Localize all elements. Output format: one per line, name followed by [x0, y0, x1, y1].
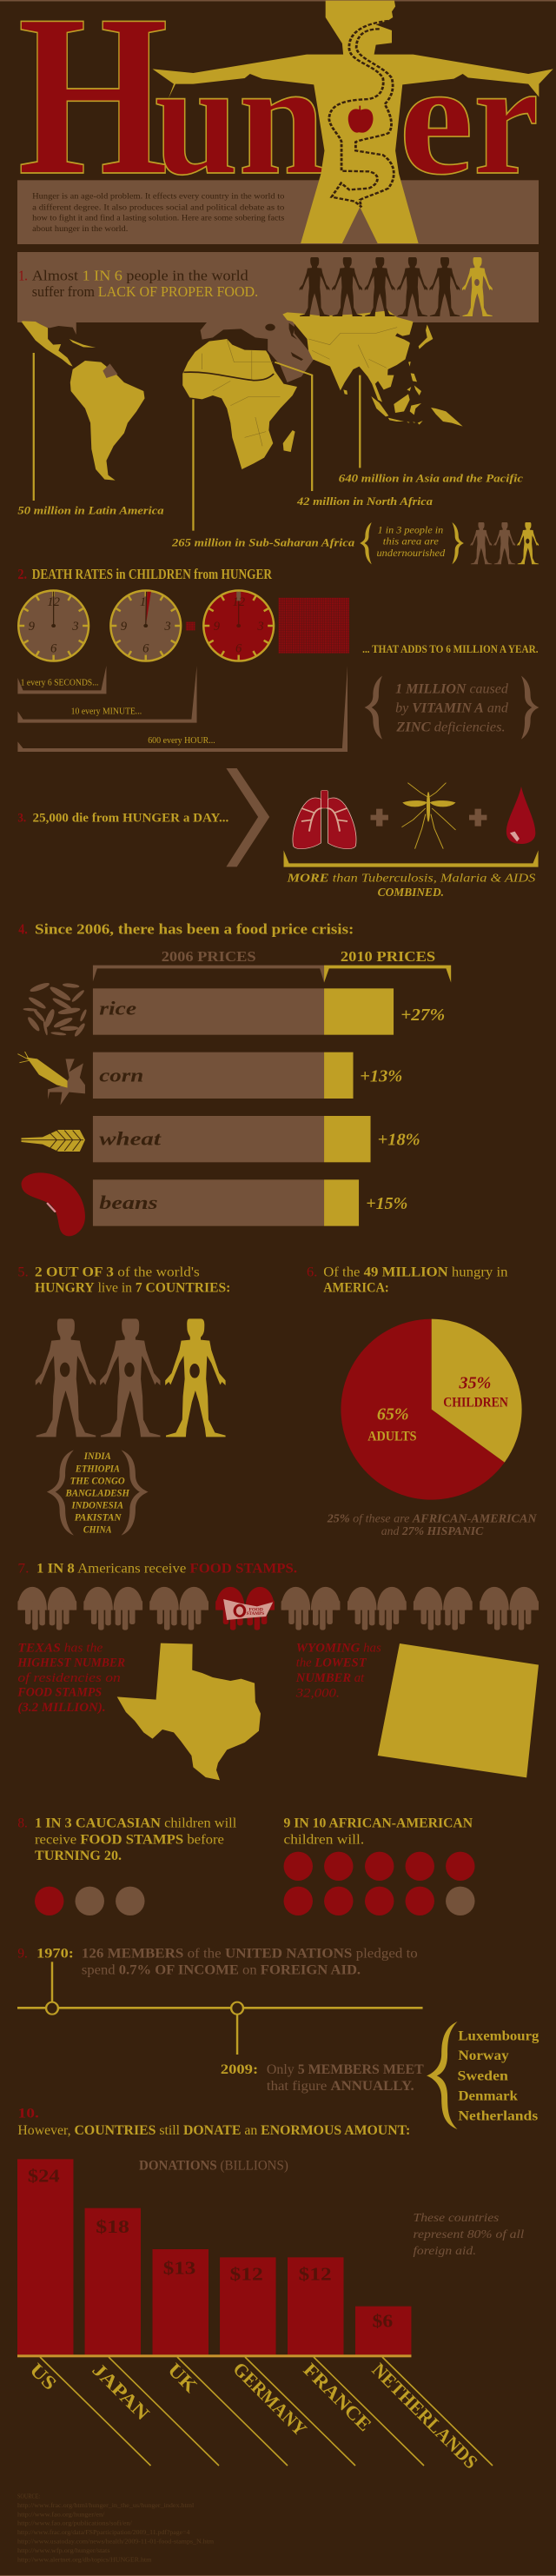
bracket: 2010: [324, 966, 451, 983]
note line 1: 1 in 3 people in: [378, 524, 443, 535]
brace right: [122, 1450, 149, 1536]
fact 1 heading line 1: Almost 1 IN 6 people in the world: [32, 268, 248, 283]
source 6: http://www.wfp.org/hunger/stats: [17, 2547, 110, 2554]
intro line 1: Hunger is an age-old problem. It effects every country in the world to: [32, 193, 284, 201]
icon: six people, one in six yellow: [300, 257, 493, 316]
title letter n: n: [238, 30, 325, 208]
African-American line 1: 9 IN 10 AFRICAN-AMERICAN: [284, 1815, 473, 1830]
world map: [17, 310, 539, 564]
label: Latin America: 50 million in Latin America: [17, 505, 164, 517]
1970 text line 1: 126 MEMBERS of the UNITED NATIONS pledged to: [82, 1945, 418, 1961]
Wyoming line 2: the LOWEST: [296, 1655, 367, 1670]
text: every 6 seconds: 1 every 6 SECONDS...: [21, 678, 99, 687]
map: Southeast Asia islands: [343, 324, 463, 427]
country: Germany: GERMANY: [228, 2358, 311, 2440]
title letter e: e: [399, 30, 473, 208]
icon: rice: [23, 981, 88, 1038]
clock 3: 6: [235, 641, 242, 655]
bracket: hour: [17, 666, 348, 752]
section 2 number: 2.: [17, 567, 27, 582]
Netherlands: Netherlands: [458, 2108, 538, 2123]
dots: 9 in 10: [284, 1852, 475, 1915]
source 2: http://www.fao.org/hunger/en/: [17, 2511, 105, 2518]
source heading: SOURCE:: [17, 2493, 40, 2500]
pie note line 2: and 27% HISPANIC: [381, 1525, 484, 1538]
map: Wyoming: [378, 1643, 539, 1777]
sections 8 and 9: [17, 1815, 539, 2129]
section 10 heading: However, COUNTRIES still DONATE an ENORMOUS AMOUNT:: [17, 2122, 410, 2138]
Wyoming line 1: WYOMING has: [296, 1640, 381, 1655]
intro text: [32, 193, 284, 234]
bar: corn: [93, 1052, 402, 1099]
fact 1 heading line 2: suffer from LACK OF PROPER FOOD.: [32, 284, 258, 300]
Texas line 3: of residencies on: [17, 1670, 121, 1685]
value: Japan: $18: [96, 2217, 129, 2237]
plus sign: [469, 809, 486, 827]
section 10: donations: [17, 2105, 524, 2357]
brace left: [360, 522, 372, 564]
Sweden: Sweden: [458, 2068, 508, 2083]
clock 3: 3: [256, 620, 264, 634]
note line 1: These countries: [414, 2212, 499, 2225]
top border: [0, 0, 556, 2]
intro line 4: about hunger in the world.: [32, 225, 128, 234]
country: Japan: JAPAN: [88, 2359, 154, 2425]
2009 text line 1: Only 5 MEMBERS MEET: [267, 2061, 424, 2077]
column head: 2006: 2006 PRICES: [162, 949, 256, 965]
country list: [65, 1450, 130, 1535]
country: Netherlands: NETHERLANDS: [367, 2359, 482, 2473]
column head: 2010: 2010 PRICES: [341, 949, 435, 965]
clock 3: [203, 590, 275, 661]
bar: rice: [93, 988, 445, 1035]
section 6 number: 6.: [307, 1264, 317, 1279]
section 7: food stamps: [17, 1561, 539, 1780]
country: France: FRANCE: [299, 2359, 376, 2435]
section 4 heading: Since 2006, there has been a food price crisis:: [35, 921, 354, 938]
map: Texas: [117, 1643, 261, 1780]
icon: lungs: [293, 790, 356, 849]
brace left: [365, 676, 382, 740]
Wyoming note: [295, 1640, 381, 1700]
source 7: http://www.alertnet.org/db/topics/HUNGER.htm: [17, 2556, 152, 2563]
section 4 number: 4.: [18, 921, 28, 938]
value: rice: +27%: [400, 1005, 445, 1024]
section 2: death rates: [17, 567, 539, 752]
vitamin note: [395, 681, 508, 734]
Bangladesh: BANGLADESH: [65, 1487, 130, 1498]
dots: 1 in 3: [35, 1887, 145, 1915]
bracket: minute: [17, 666, 197, 723]
clock 2: [110, 590, 182, 661]
icon row: hands: [17, 1587, 539, 1630]
section 8 line 2: receive FOOD STAMPS before: [35, 1831, 224, 1847]
brace left: [47, 1450, 74, 1536]
axis labels: countries: [25, 2358, 482, 2473]
Ethiopia: ETHIOPIA: [75, 1463, 120, 1474]
source 5: http://www.usatoday.com/news/health/2009-11-01-food-stamps_N.htm: [17, 2538, 215, 2545]
bar chart: [17, 2159, 411, 2357]
bar: wheat: [93, 1116, 420, 1162]
label: rice: rice: [99, 998, 136, 1019]
arrow: chevron: [226, 768, 269, 866]
grid: 600 deaths: [278, 598, 349, 654]
section 8 number: 8.: [17, 1815, 28, 1830]
value: wheat: +18%: [378, 1130, 420, 1149]
section 6 heading line 2: AMERICA:: [323, 1279, 389, 1295]
pie chart: [341, 1319, 522, 1500]
icon: wheat: [21, 1130, 85, 1152]
Norway: Norway: [458, 2048, 509, 2063]
Texas note: [17, 1640, 125, 1715]
icon: three people, two in three: [36, 1318, 226, 1437]
brace right: [452, 522, 464, 564]
map: Caribbean: [70, 339, 96, 348]
plus sign: [371, 809, 388, 827]
brace: [427, 2022, 458, 2129]
section 10 number: 10.: [17, 2105, 39, 2121]
value: France: $12: [299, 2264, 332, 2285]
value: corn: +13%: [360, 1066, 402, 1086]
timeline: [17, 1962, 423, 2055]
1970 label: 1970:: [36, 1945, 74, 1961]
map: inland seas: [265, 323, 303, 361]
2009 label: 2009:: [221, 2061, 258, 2077]
caption line 1: MORE than Tuberculosis, Malaria & AIDS: [287, 873, 536, 885]
section 7 number: 7.: [17, 1561, 29, 1576]
map: Asia: [282, 310, 414, 402]
label: North Africa: 42 million in North Africa: [296, 495, 433, 508]
China: CHINA: [83, 1524, 112, 1535]
value: Germany: $12: [229, 2264, 263, 2285]
note line 3: foreign aid.: [414, 2245, 476, 2258]
value: 35%: 35%: [459, 1372, 491, 1392]
icon: corn: [17, 1052, 85, 1105]
Indonesia: INDONESIA: [71, 1499, 123, 1510]
mini grid: [186, 621, 195, 630]
header: title and figure: [17, 0, 553, 322]
country: UK: UK: [163, 2359, 202, 2397]
map: Guiana: [103, 363, 118, 378]
bracket: [284, 850, 539, 867]
note line 2: represent 80% of all: [414, 2228, 524, 2241]
African-American line 2: children will.: [284, 1831, 364, 1847]
chart title: DONATIONS (BILLIONS): [139, 2158, 288, 2173]
value: beans: +15%: [366, 1193, 407, 1212]
icon: bean: [21, 1172, 85, 1236]
icon: three people: [471, 522, 539, 564]
section 7 heading: 1 IN 8 Americans receive FOOD STAMPS.: [36, 1561, 297, 1576]
Texas line 2: HIGHEST NUMBER: [17, 1655, 125, 1670]
clock 1: 6: [50, 641, 57, 655]
section 3: 25,000 die a day: [17, 768, 539, 900]
section 3 number: 3.: [17, 810, 26, 825]
section 4: food price crisis: [17, 921, 451, 1236]
figure silhouette: [153, 1, 553, 243]
note line 2: this area are: [383, 536, 439, 547]
note line 3: undernourished: [376, 548, 446, 559]
label: beans: beans: [99, 1192, 158, 1213]
value: 65%: 65%: [377, 1404, 409, 1424]
clock 1: 3: [71, 620, 79, 634]
clock 2: 3: [163, 620, 171, 634]
clock 1: 9: [29, 620, 36, 634]
Denmark: Denmark: [458, 2088, 518, 2103]
callout lines: [34, 353, 360, 531]
fact 1 number: 1.: [18, 268, 28, 283]
icon: apple: [348, 106, 373, 133]
vitamin line 3: ZINC deficiencies.: [395, 720, 506, 734]
sections 5 and 6: [17, 1264, 538, 1538]
bracket: 2006: [93, 966, 324, 983]
clock 1: [18, 590, 89, 661]
map: Madagascar: [283, 430, 295, 452]
intro line 2: a different degree. It also produces social and political debate as to: [32, 203, 284, 212]
clock 2: 6: [142, 641, 149, 655]
Texas line 5: (3.2 MILLION).: [17, 1700, 106, 1715]
icon: food stamp: FOOD: [249, 1608, 263, 1612]
1970 text line 2: spend 0.7% OF INCOME on FOREIGN AID.: [82, 1962, 361, 1977]
label: Asia and the Pacific: 640 million in Asia and the Pacific: [339, 473, 524, 485]
vitamin line 2: by VITAMIN A and: [395, 700, 508, 715]
digestive tract dashes: [329, 21, 388, 207]
caption line 2: COMBINED.: [378, 886, 444, 900]
vitamin line 1: 1 MILLION caused: [395, 681, 508, 696]
Texas line 4: FOOD STAMPS: [17, 1684, 102, 1699]
clock 3: 9: [214, 620, 221, 634]
clock 1: 12: [47, 595, 61, 609]
Pakistan: PAKISTAN: [75, 1511, 122, 1523]
section 5 heading line 2: HUNGRY live in 7 COUNTRIES:: [35, 1279, 230, 1295]
section 5 heading line 1: 2 OUT OF 3 of the world's: [35, 1264, 200, 1279]
clock 3: 12: [232, 595, 246, 609]
text: every hour: 600 every HOUR...: [148, 736, 215, 746]
members list: [458, 2028, 539, 2123]
2009 text line 2: that figure ANNUALLY.: [267, 2078, 414, 2094]
Wyoming line 3: NUMBER at: [295, 1670, 365, 1685]
section 8 line 1: 1 IN 3 CAUCASIAN children will: [35, 1815, 236, 1830]
map: Africa: [182, 339, 297, 469]
pie slice: adults: [341, 1319, 505, 1500]
bracket: seconds: [17, 666, 106, 694]
clock 2: 9: [121, 620, 128, 634]
diagonal axis lines: [40, 2357, 493, 2466]
figure: standing person with digestive tract: [153, 1, 553, 243]
value: US: $24: [28, 2167, 60, 2187]
country: US: US: [25, 2359, 61, 2394]
label: corn: corn: [99, 1065, 143, 1086]
clock 2: 1: [140, 595, 146, 609]
label: adults: ADULTS: [367, 1429, 417, 1444]
panel: intro background: [17, 180, 539, 244]
Texas line 1: TEXAS has the: [17, 1640, 103, 1655]
intro line 3: how to fight it and find a lasting solution. Here are some sobering facts: [32, 215, 284, 222]
map: tan Europe and Middle East: [201, 319, 314, 382]
section 9 number: 9.: [17, 1945, 28, 1961]
brace right: [521, 676, 539, 740]
pie slice: children: [432, 1319, 522, 1463]
section 8 line 3: TURNING 20.: [35, 1848, 122, 1863]
icon: blood drop: [506, 787, 535, 844]
section 2 heading: DEATH RATES in CHILDREN from HUNGER: [32, 567, 272, 582]
source 4: http://www.frac.org/data/FSPparticipation/2009_11.pdf?page=4: [17, 2529, 189, 2536]
icon: food stamp: STAMPS: [247, 1611, 264, 1617]
section 6 heading line 1: Of the 49 MILLION hungry in: [323, 1264, 508, 1279]
section 3 heading: 25,000 die from HUNGER a DAY...: [33, 810, 228, 825]
map: South America: [70, 361, 145, 481]
digestive tract inner dashes: [355, 29, 394, 207]
label: children: CHILDREN: [443, 1395, 508, 1410]
pie note line 1: 25% of these are AFRICAN-AMERICAN: [327, 1513, 538, 1525]
sources: [17, 2493, 215, 2563]
value: UK: $13: [163, 2259, 195, 2279]
source 3: http://www.fao.org/publications/sofi/en/: [17, 2520, 133, 2526]
source 1: http://www.frac.org/html/hunger_in_the_us/hunger_index.html: [17, 2502, 195, 2509]
label: Sub-Saharan Africa: 265 million in Sub-Saharan Africa: [171, 537, 354, 549]
undernourished note: [376, 524, 446, 559]
map: tan North America: [25, 322, 76, 335]
map labels: [17, 473, 524, 549]
title letter g, formed by the figure: g: [337, 68, 380, 164]
panel: fact 1 background: [17, 252, 539, 322]
Wyoming line 4: 32,000.: [295, 1685, 340, 1700]
title letter u: u: [155, 30, 238, 208]
section 5 number: 5.: [17, 1264, 29, 1279]
India: INDIA: [83, 1450, 111, 1462]
icon: food stamp: [223, 1599, 273, 1620]
map: North Africa divider: [183, 372, 274, 381]
map: Mexico and Central America: [21, 321, 73, 367]
bar: beans: [93, 1179, 407, 1226]
Luxembourg: Luxembourg: [458, 2028, 539, 2043]
value: Netherlands: $6: [373, 2311, 393, 2332]
label: wheat: wheat: [99, 1128, 162, 1150]
text: every minute: 10 every MINUTE...: [71, 707, 142, 716]
The Congo: THE CONGO: [70, 1475, 125, 1486]
chart note: [414, 2212, 524, 2258]
icon: mosquito: [401, 783, 455, 849]
bottom border: [0, 2575, 556, 2576]
